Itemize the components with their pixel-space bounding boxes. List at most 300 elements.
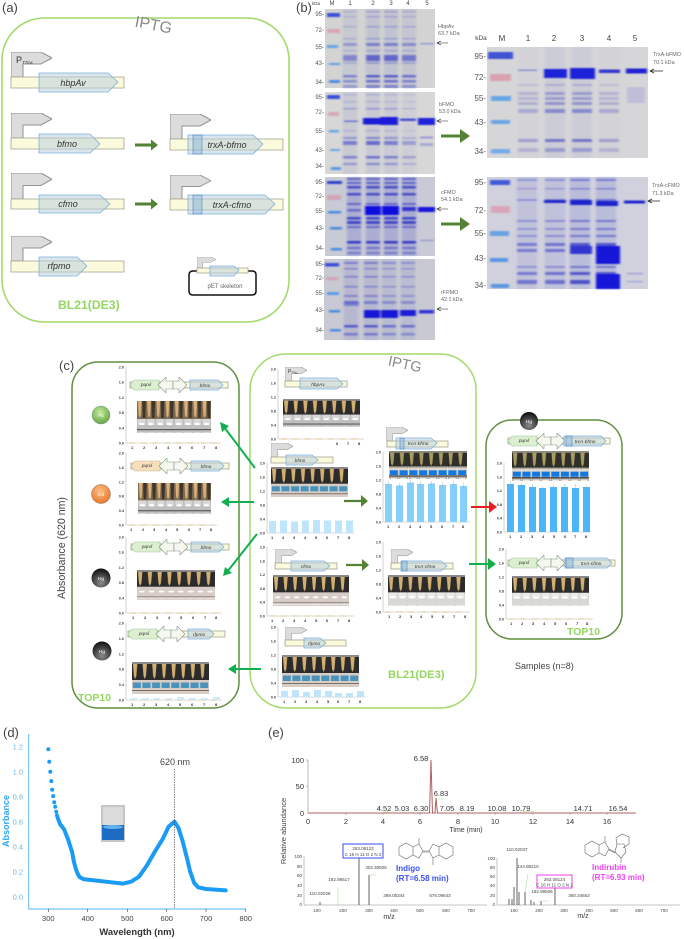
ladder ticks: 34- <box>315 164 324 170</box>
label (e): (e) <box>268 725 284 740</box>
y-axis title: Absorbance (620 nm) <box>56 497 68 599</box>
chart: hbpAv: 678 <box>336 441 361 446</box>
pET skeleton plasmid: pET skeleton <box>208 284 242 290</box>
chart: bfmo: 2.0 <box>260 462 265 466</box>
mass spectrum: indigo: 100 <box>313 908 321 913</box>
chart: trxA-bfmo: 1.6 <box>376 464 381 468</box>
mass spectrum: indirubin: 20 <box>490 893 495 898</box>
gene circuit: yuhd <box>518 438 530 444</box>
lane headers: large gels: 2 <box>552 34 557 43</box>
bars <box>507 484 590 532</box>
x tick labels: 700 <box>200 914 212 923</box>
ladder ticks: 72- <box>474 206 486 215</box>
photo: tubes and vials <box>137 570 215 600</box>
panel (d): absorbance spectrum <box>1 725 252 937</box>
ladder ticks: 43- <box>315 61 324 67</box>
ladder ticks: 55- <box>474 229 486 238</box>
compound label: Indirubin <box>592 863 645 882</box>
construct: bfmo: bfmo <box>57 139 77 149</box>
chart: trxA-bfmo <box>376 427 470 529</box>
chart: rfpmo: 12345678 <box>283 699 362 704</box>
chart: trxA-bfmo: 0.8 <box>376 492 381 496</box>
chromatogram: 50 <box>296 782 304 791</box>
gene circuit: bfmo <box>201 545 212 551</box>
chart: Hg bfmo: 0.0 <box>119 612 124 616</box>
chart: Hg trxA-cfmo: 12345678 <box>510 621 589 626</box>
chart: Hg trxA-cfmo: 1.6 <box>499 562 504 566</box>
chart: Pb bfmo: 2.0 <box>119 366 124 370</box>
retention time labels: 4.52 <box>377 804 391 813</box>
chromatogram: 16 <box>603 817 611 826</box>
formula box: 263.08124 <box>544 877 566 882</box>
chart: trxA-cfmo: 0.0 <box>376 610 381 614</box>
chromatogram <box>291 754 636 834</box>
axes <box>29 734 246 909</box>
chart: hbpAv: 0.0 <box>271 438 276 442</box>
y axis title: Relative abundance <box>279 798 288 864</box>
chart: cfmo: 0.0 <box>260 614 265 618</box>
lane headers: large gels: M <box>499 34 506 43</box>
gel: bFMO <box>315 92 461 174</box>
chart: Cd bfmo: 0.0 <box>119 524 124 528</box>
ladder ticks: 34- <box>474 281 486 290</box>
chart: hbpAv <box>271 367 364 446</box>
structure: indirubin <box>585 834 629 863</box>
chart: trxA-bfmo: 0.0 <box>376 520 381 524</box>
label (d): (d) <box>3 725 19 740</box>
mass spectrum: indigo: 100 <box>294 854 302 859</box>
arrow: bfmo to trxA-bfmo <box>344 495 368 507</box>
mass spectrum: indigo: 40 <box>297 883 302 888</box>
chart: Hg trxA-bfmo: 1.2 <box>497 489 502 493</box>
ladder ticks: 72- <box>474 73 486 82</box>
construct: bfmo <box>11 113 124 153</box>
gene circuit <box>508 433 610 449</box>
chart: Pb bfmo <box>92 366 228 450</box>
ladder ticks <box>474 178 486 290</box>
mass spectrum: indigo: 0 <box>299 902 302 907</box>
chart: hbpAv: 2.0 <box>271 368 276 372</box>
mass spectrum: indigo: 600 <box>442 908 450 913</box>
x tick labels <box>42 914 252 923</box>
formula box: C 16 H 11 O 2 N 2 <box>345 852 382 857</box>
gel annotation: 63.7 kDa <box>438 31 460 37</box>
chart: Hg trxA-cfmo: 0.4 <box>499 604 505 608</box>
mass spectrum: indigo: 200 <box>339 908 347 913</box>
chart: trxA-bfmo: 2.0 <box>376 450 381 454</box>
chart: cfmo <box>260 546 354 623</box>
peak labels: 182.98517 <box>328 877 350 882</box>
chart: Hg bfmo: 1.6 <box>119 551 124 555</box>
mass spectrum: indirubin: 40 <box>490 883 495 888</box>
gene circuit: bfmo <box>201 464 212 470</box>
y tick labels: 0.2 <box>13 868 23 876</box>
chart: rfpmo: 2.0 <box>271 626 276 630</box>
formula box <box>343 844 383 858</box>
ladder ticks: 34- <box>474 147 486 156</box>
IPTG label: IPTG <box>133 14 173 38</box>
chart: Hg rfpmo: 12345678 <box>131 702 218 707</box>
bars <box>281 690 364 697</box>
arrow: to Pb circuit <box>220 422 255 468</box>
panel (e): LC-MS <box>268 725 680 921</box>
photo: cuvette <box>101 805 125 842</box>
mass spectrum: indigo: 400 <box>390 908 398 913</box>
icon: Hg metal ion right: Hg <box>526 419 532 425</box>
gene construct: rfpmo <box>308 641 320 647</box>
ladder ticks: 95- <box>315 180 324 186</box>
chart: cfmo: 0.8 <box>260 587 265 591</box>
lane headers: large gels: 1 <box>526 34 531 43</box>
mass spectrum: indirubin: 80 <box>490 865 495 870</box>
lane headers: large gels: 4 <box>607 34 612 43</box>
ladder ticks: 55- <box>474 94 486 103</box>
arrow: cFMO to TrxA-cFMO gel <box>441 217 470 231</box>
compound label: Indigo: Indigo <box>396 864 420 873</box>
ladder ticks: 95- <box>474 178 486 187</box>
gene construct: cfmo <box>301 564 312 570</box>
retention time labels: 8.19 <box>460 804 474 813</box>
x tick labels: 300 <box>42 914 55 923</box>
bars <box>269 520 353 533</box>
chart: Hg bfmo: 12345678 <box>132 615 218 620</box>
y tick labels: 0.4 <box>13 842 23 852</box>
ladder ticks: 95- <box>315 12 324 18</box>
y axis title: Absorbance <box>1 795 11 847</box>
gel annotation: 70.1 kDa <box>653 60 675 66</box>
y tick labels: 0.6 <box>13 818 23 826</box>
icon: Pb metal ion: Pb <box>98 413 104 419</box>
gel annotation <box>437 24 460 45</box>
lane headers: 3 <box>389 1 393 7</box>
gene circuit: yuhd <box>518 560 530 566</box>
chart: Hg trxA-cfmo: 1.2 <box>499 576 504 580</box>
mass spectrum: indirubin: 200 <box>535 908 543 913</box>
BL21(DE3) label: BL21(DE3) <box>58 298 120 312</box>
construct: hbpAv: T7lac <box>22 60 34 65</box>
gel annotation <box>437 290 463 311</box>
photo: tubes and vials <box>512 576 589 606</box>
peak labels <box>507 847 590 898</box>
gene circuit: yuhd <box>141 463 153 469</box>
y tick labels: 0.8 <box>13 792 23 802</box>
mass spectrum: indigo: 20 <box>297 893 302 898</box>
lane headers: large gels: kDa <box>475 35 487 42</box>
x tick labels: 400 <box>81 914 94 923</box>
mass spectrum: indirubin: 600 <box>635 908 643 913</box>
gel annotation <box>650 52 681 73</box>
retention time labels: 16.54 <box>609 804 627 813</box>
frame: TOP10 right <box>486 420 622 639</box>
lane headers: large gels: 5 <box>633 34 638 43</box>
chart: trxA-cfmo: 12345678 <box>388 614 467 619</box>
mass spectrum: indirubin: m/z <box>577 913 589 920</box>
icon: Hg metal ion: Hg <box>99 649 105 655</box>
construct: trxA-bfmo <box>170 114 283 154</box>
panel (a): construct designs in BL21(DE3) <box>2 0 289 322</box>
chart: Hg trxA-bfmo: 0.0 <box>497 530 502 534</box>
ladder ticks: 55- <box>315 129 324 135</box>
chart: rfpmo: 0.4 <box>271 682 277 686</box>
ladder ticks <box>315 180 324 252</box>
gel annotation: cFMO <box>441 190 456 196</box>
mass spectrum: indigo: 700 <box>467 908 475 913</box>
chart: bfmo: 0.4 <box>260 518 266 522</box>
spectrum curve <box>46 747 226 890</box>
ladder ticks: 55- <box>315 291 324 297</box>
icon: Hg metal ion right <box>520 412 538 430</box>
gel annotation: 71.3 kDa <box>652 191 674 197</box>
gene construct: T7lac <box>291 372 298 374</box>
gel: HbpAv <box>315 9 460 88</box>
panel (b): SDS-PAGE gels <box>296 0 681 340</box>
chromatogram: 100 <box>291 756 304 765</box>
construct: trxA-bfmo: trxA-bfmo <box>207 140 247 150</box>
gene construct: trxA-cfmo <box>415 564 436 570</box>
mass spectrum: indirubin <box>487 834 680 920</box>
chart: bfmo <box>260 443 354 540</box>
frame: TOP10 left <box>72 362 239 708</box>
gel annotation: HbpAv <box>438 24 454 30</box>
chart: trxA-cfmo: 0.8 <box>376 582 381 586</box>
peak labels: 182.98506 <box>531 889 553 894</box>
ladder ticks: 72- <box>315 194 324 200</box>
gel annotation: 53.0 kDa <box>439 109 461 115</box>
error bars <box>388 480 464 489</box>
arrow: bfmo to trxA-bfmo <box>135 140 158 150</box>
chart: Pb bfmo: 1.6 <box>119 381 124 385</box>
ladder ticks: 55- <box>315 209 324 215</box>
construct: hbpAv <box>11 52 124 92</box>
ladder ticks: 34- <box>315 80 324 86</box>
y tick labels: 0.0 <box>13 892 23 902</box>
gel: rFPMO <box>315 259 463 340</box>
retention time labels: 6.58 <box>414 754 428 763</box>
chart: Pb bfmo: 0.0 <box>119 442 124 446</box>
mass spectrum: indirubin: 700 <box>660 908 668 913</box>
mass spectrum: indirubin: 100 <box>487 856 495 861</box>
ladder ticks: 43- <box>474 254 486 263</box>
lane headers: 1 <box>348 1 352 7</box>
gene construct: hbpAv <box>311 382 325 388</box>
label (a): (a) <box>2 0 18 15</box>
chart: Hg rfpmo: 1.6 <box>119 637 124 641</box>
gel annotation <box>648 183 680 203</box>
chart: Hg bfmo: 1.2 <box>119 566 124 570</box>
chart: Cd bfmo: 0.4 <box>119 509 125 513</box>
label (b): (b) <box>296 0 312 15</box>
gene circuit: trxA-cfmo <box>581 561 602 567</box>
ladder ticks: 72- <box>315 276 324 282</box>
chart: Pb bfmo: 0.4 <box>119 426 125 430</box>
arrow: bFMO to TrxA-bFMO gel <box>441 129 470 143</box>
photo: tubes and vials <box>512 451 589 481</box>
chart: Hg trxA-cfmo: 2.0 <box>499 548 504 552</box>
peak labels: 110.02037 <box>507 847 528 852</box>
chromatogram: Time (min) <box>449 827 483 834</box>
chart: Pb bfmo: 0.8 <box>119 411 124 415</box>
chart: Hg bfmo: 0.8 <box>119 581 124 585</box>
gene circuit <box>130 377 228 393</box>
chart: bfmo: 1.2 <box>260 490 265 494</box>
construct: cfmo: cfmo <box>58 199 78 209</box>
ladder ticks <box>315 95 324 170</box>
frame: BL21(DE3) middle <box>250 354 476 708</box>
construct: trxA-cfmo: trxA-cfmo <box>213 200 251 210</box>
gel annotation <box>437 102 461 123</box>
lane headers: 2 <box>371 1 375 7</box>
chart: Hg trxA-cfmo: 0.8 <box>499 590 504 594</box>
x tick labels: 500 <box>121 914 134 923</box>
construct: trxA-cfmo <box>170 175 283 214</box>
chart: trxA-cfmo <box>376 540 470 619</box>
x tick labels: 800 <box>239 914 252 923</box>
ladder ticks: 95- <box>315 262 324 268</box>
mass spectrum: indirubin: 0 <box>492 902 495 907</box>
label (c): (c) <box>59 358 74 373</box>
compound label: Indirubin: (RT=6.93 min) <box>592 873 645 882</box>
construct: hbpAv: hbpAv <box>60 78 86 88</box>
peak labels: 360.34653 <box>568 893 590 898</box>
lane headers: large gels <box>475 34 638 43</box>
retention time labels: 10.79 <box>512 804 530 813</box>
chart: Hg trxA-bfmo <box>497 433 610 539</box>
chromatogram: 2 <box>344 817 348 826</box>
formula box <box>536 875 573 888</box>
chart: hbpAv: 0.4 <box>271 424 277 428</box>
chart: trxA-bfmo: 1.2 <box>376 478 381 482</box>
ladder ticks: 95- <box>315 95 324 101</box>
chart: Hg rfpmo <box>92 622 225 707</box>
gel annotation <box>437 190 463 211</box>
chart: rfpmo <box>271 626 365 704</box>
gene circuit: yuhd <box>141 544 153 550</box>
chart: trxA-cfmo: 1.2 <box>376 568 381 572</box>
arrow: red to Hg trxA-bfmo <box>471 501 497 513</box>
photo: tubes and vials <box>283 399 360 427</box>
photo: tubes and vials <box>132 662 209 694</box>
ladder ticks: 34- <box>315 328 324 334</box>
bars <box>385 482 467 522</box>
chart: Hg rfpmo: 0.4 <box>119 683 125 687</box>
mass spectrum: indigo: 80 <box>297 864 302 869</box>
chart: Hg bfmo <box>92 536 229 620</box>
frame: BL21(DE3) cell <box>2 18 289 322</box>
gene circuit: yuhd <box>140 382 152 388</box>
y tick labels: 1.0 <box>13 768 23 776</box>
chart: Hg trxA-bfmo: 0.8 <box>497 503 502 507</box>
samples axis caption: Samples (n=8) <box>515 661 574 671</box>
gene construct: P <box>288 369 291 375</box>
peak labels: 389.05344 <box>383 893 405 898</box>
gel: TrxA-cFMO <box>474 177 680 290</box>
chart: cfmo: 1.6 <box>260 559 265 563</box>
photo: tubes and vials <box>137 401 211 433</box>
chart: trxA-cfmo: 0.4 <box>376 596 382 600</box>
mass spectrum: indigo: m/z <box>383 914 395 921</box>
chart: cfmo: 2.0 <box>260 546 265 550</box>
arrow: to Hg circuit <box>223 534 257 576</box>
chart: trxA-bfmo: 12345678 <box>387 524 465 529</box>
BL21(DE3) label: BL21(DE3) <box>388 669 445 681</box>
chromatogram: 0 <box>300 809 304 818</box>
icon: Hg metal ion: Hg <box>98 576 104 582</box>
chart: trxA-bfmo: 0.4 <box>376 506 382 510</box>
icon: Cd metal ion: Cd <box>98 492 104 498</box>
chart: Hg rfpmo: 1.2 <box>119 652 124 656</box>
y tick labels <box>13 742 23 902</box>
mass spectrum: indigo: 60 <box>297 873 302 878</box>
mass spectrum: indigo <box>294 838 487 921</box>
chart: Hg rfpmo: 0.0 <box>119 698 124 702</box>
chart: Hg rfpmo: 0.8 <box>119 668 124 672</box>
gel annotation: bFMO <box>439 102 454 108</box>
chromatogram: 8 <box>456 817 460 826</box>
lane headers <box>312 1 429 7</box>
chart: Hg trxA-bfmo: 12345678 <box>509 534 588 539</box>
bars <box>130 697 220 700</box>
chart: Cd bfmo: 1.6 <box>119 466 124 470</box>
chart: rfpmo: 1.2 <box>271 654 276 658</box>
chromatogram: 4 <box>381 817 385 826</box>
retention time labels: 7.05 <box>440 804 454 813</box>
ladder ticks <box>474 52 486 156</box>
lane headers: M <box>330 1 334 7</box>
chromatogram: 0 <box>306 817 310 826</box>
gene circuit: rfpmo <box>193 632 205 638</box>
mass spectrum: indigo: 300 <box>365 908 373 913</box>
lane headers: 5 <box>425 1 429 7</box>
chart: Cd bfmo: 0.8 <box>119 495 124 499</box>
mass spectrum: indirubin: 60 <box>490 874 495 879</box>
chart: Cd bfmo: 1.2 <box>119 480 124 484</box>
photo: tubes and vials <box>271 467 348 497</box>
formula box: C 16 H 11 O 2 N 2 <box>536 882 573 888</box>
construct: rfpmo: rfpmo <box>47 261 71 271</box>
peak labels: 144.98210 <box>517 864 539 869</box>
peak labels: 110.02028 <box>310 891 331 896</box>
ladder ticks: 43- <box>315 226 324 232</box>
construct: rfpmo <box>11 236 124 276</box>
ladder ticks: 55- <box>315 45 324 51</box>
620 nm marker: 620 nm <box>160 757 190 767</box>
chromatogram: 6 <box>418 817 422 826</box>
chart: Hg trxA-cfmo: 0.0 <box>499 618 504 622</box>
x axis title: Wavelength (nm) <box>99 926 175 937</box>
chart: trxA-cfmo: 2.0 <box>376 540 381 544</box>
chart: Hg trxA-bfmo: 2.0 <box>497 462 502 466</box>
gene circuit <box>508 555 615 571</box>
lane headers: 4 <box>406 1 410 7</box>
TOP10 label: TOP10 <box>78 692 111 704</box>
chart: bfmo: 0.8 <box>260 504 265 508</box>
mass spectrum: indirubin: 400 <box>585 908 593 913</box>
gene construct <box>285 367 347 389</box>
chromatogram: 12 <box>529 817 537 826</box>
construct: hbpAv: P <box>16 55 22 65</box>
ladder ticks: 43- <box>315 148 324 154</box>
ladder ticks: 43- <box>474 118 486 127</box>
chart: Hg rfpmo: 2.0 <box>119 622 124 626</box>
chart: Pb bfmo: 1.2 <box>119 396 124 400</box>
photo: tubes and vials <box>273 575 349 606</box>
chart: Hg bfmo: 0.4 <box>119 596 125 600</box>
peak labels: 302.30508 <box>365 865 387 870</box>
arrow: green to Hg trxA-cfmo <box>469 558 496 570</box>
ladder ticks <box>315 12 324 86</box>
chart: hbpAv: 0.8 <box>271 410 276 414</box>
gel: TrxA-bFMO <box>474 47 681 158</box>
